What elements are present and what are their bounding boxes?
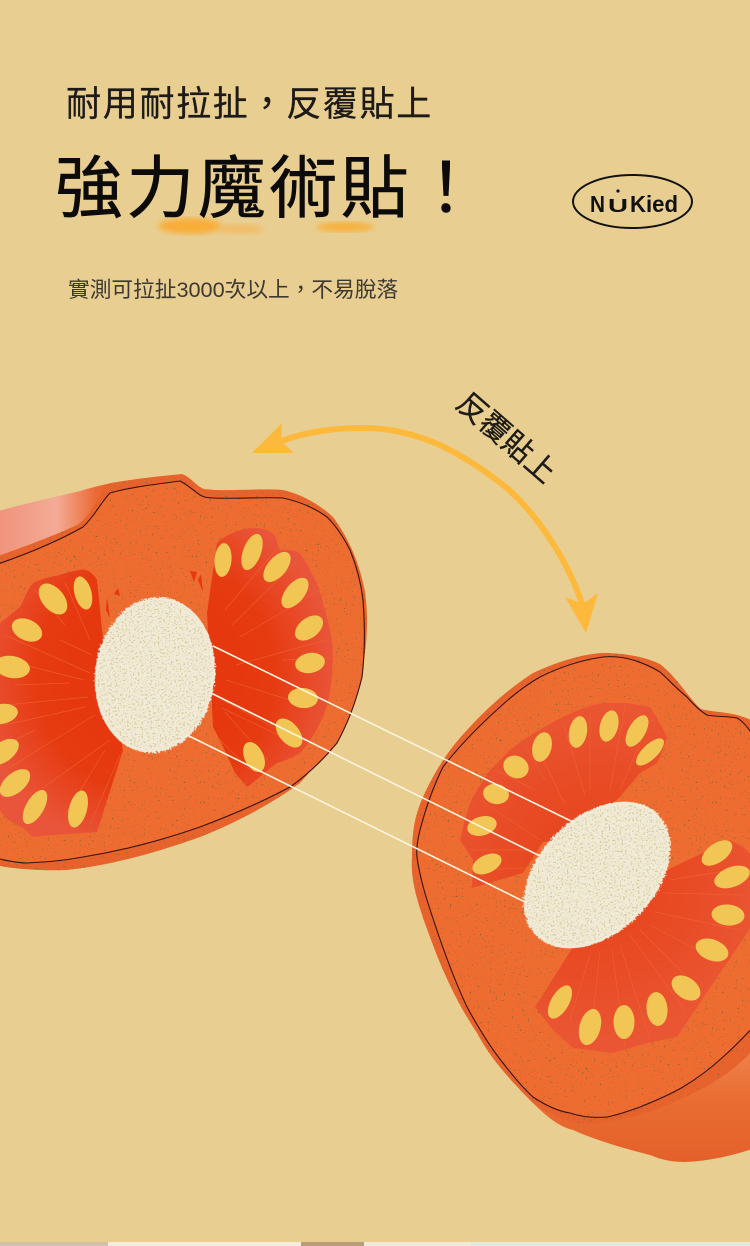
bottom image strip [0, 1242, 750, 1246]
left tomato slice [0, 470, 372, 875]
left tomato flesh segment, right [207, 528, 333, 787]
right tomato seeds [465, 708, 750, 1048]
right tomato flesh face [417, 657, 750, 1117]
connecting white lines between patches [187, 646, 573, 903]
left tomato seeds [0, 531, 328, 830]
left tomato speckles [0, 470, 372, 875]
right tomato outer rim [412, 653, 750, 1124]
right tomato flesh segment, lower [535, 840, 750, 1053]
subheading: 耐用耐拉扯，反覆貼上 [66, 85, 433, 124]
right tomato side [520, 1040, 750, 1162]
orange highlight smudge under heading [158, 218, 374, 234]
right tomato velcro patch [522, 802, 672, 949]
right tomato speckles [405, 648, 750, 1128]
left tomato flesh veins [5, 545, 332, 825]
supporting text: 實測可拉扯3000次以上，不易脫落 [68, 277, 398, 302]
left tomato small red fragments [106, 571, 203, 618]
right tomato flesh segment, upper [460, 703, 667, 888]
double-headed curved arrow [252, 423, 598, 633]
right tomato skin outline [417, 657, 750, 1117]
right tomato slice [405, 648, 750, 1162]
logo: NUKied [573, 175, 692, 228]
rotated label: 反覆貼上: 反覆貼上 [450, 386, 562, 490]
logo: NUKied: U [608, 196, 628, 216]
left tomato outer rim [0, 474, 367, 870]
left tomato pink side [0, 484, 107, 570]
left tomato skin outline [0, 481, 364, 863]
main heading: 強力魔術貼！ [55, 151, 483, 227]
left tomato flesh segment, left [0, 569, 123, 837]
logo: NUKied: Kied [630, 191, 678, 217]
left tomato velcro patch [92, 596, 217, 754]
logo: NUKied: N [590, 191, 605, 217]
right tomato flesh veins [470, 705, 745, 1048]
left tomato flesh face [0, 481, 364, 863]
